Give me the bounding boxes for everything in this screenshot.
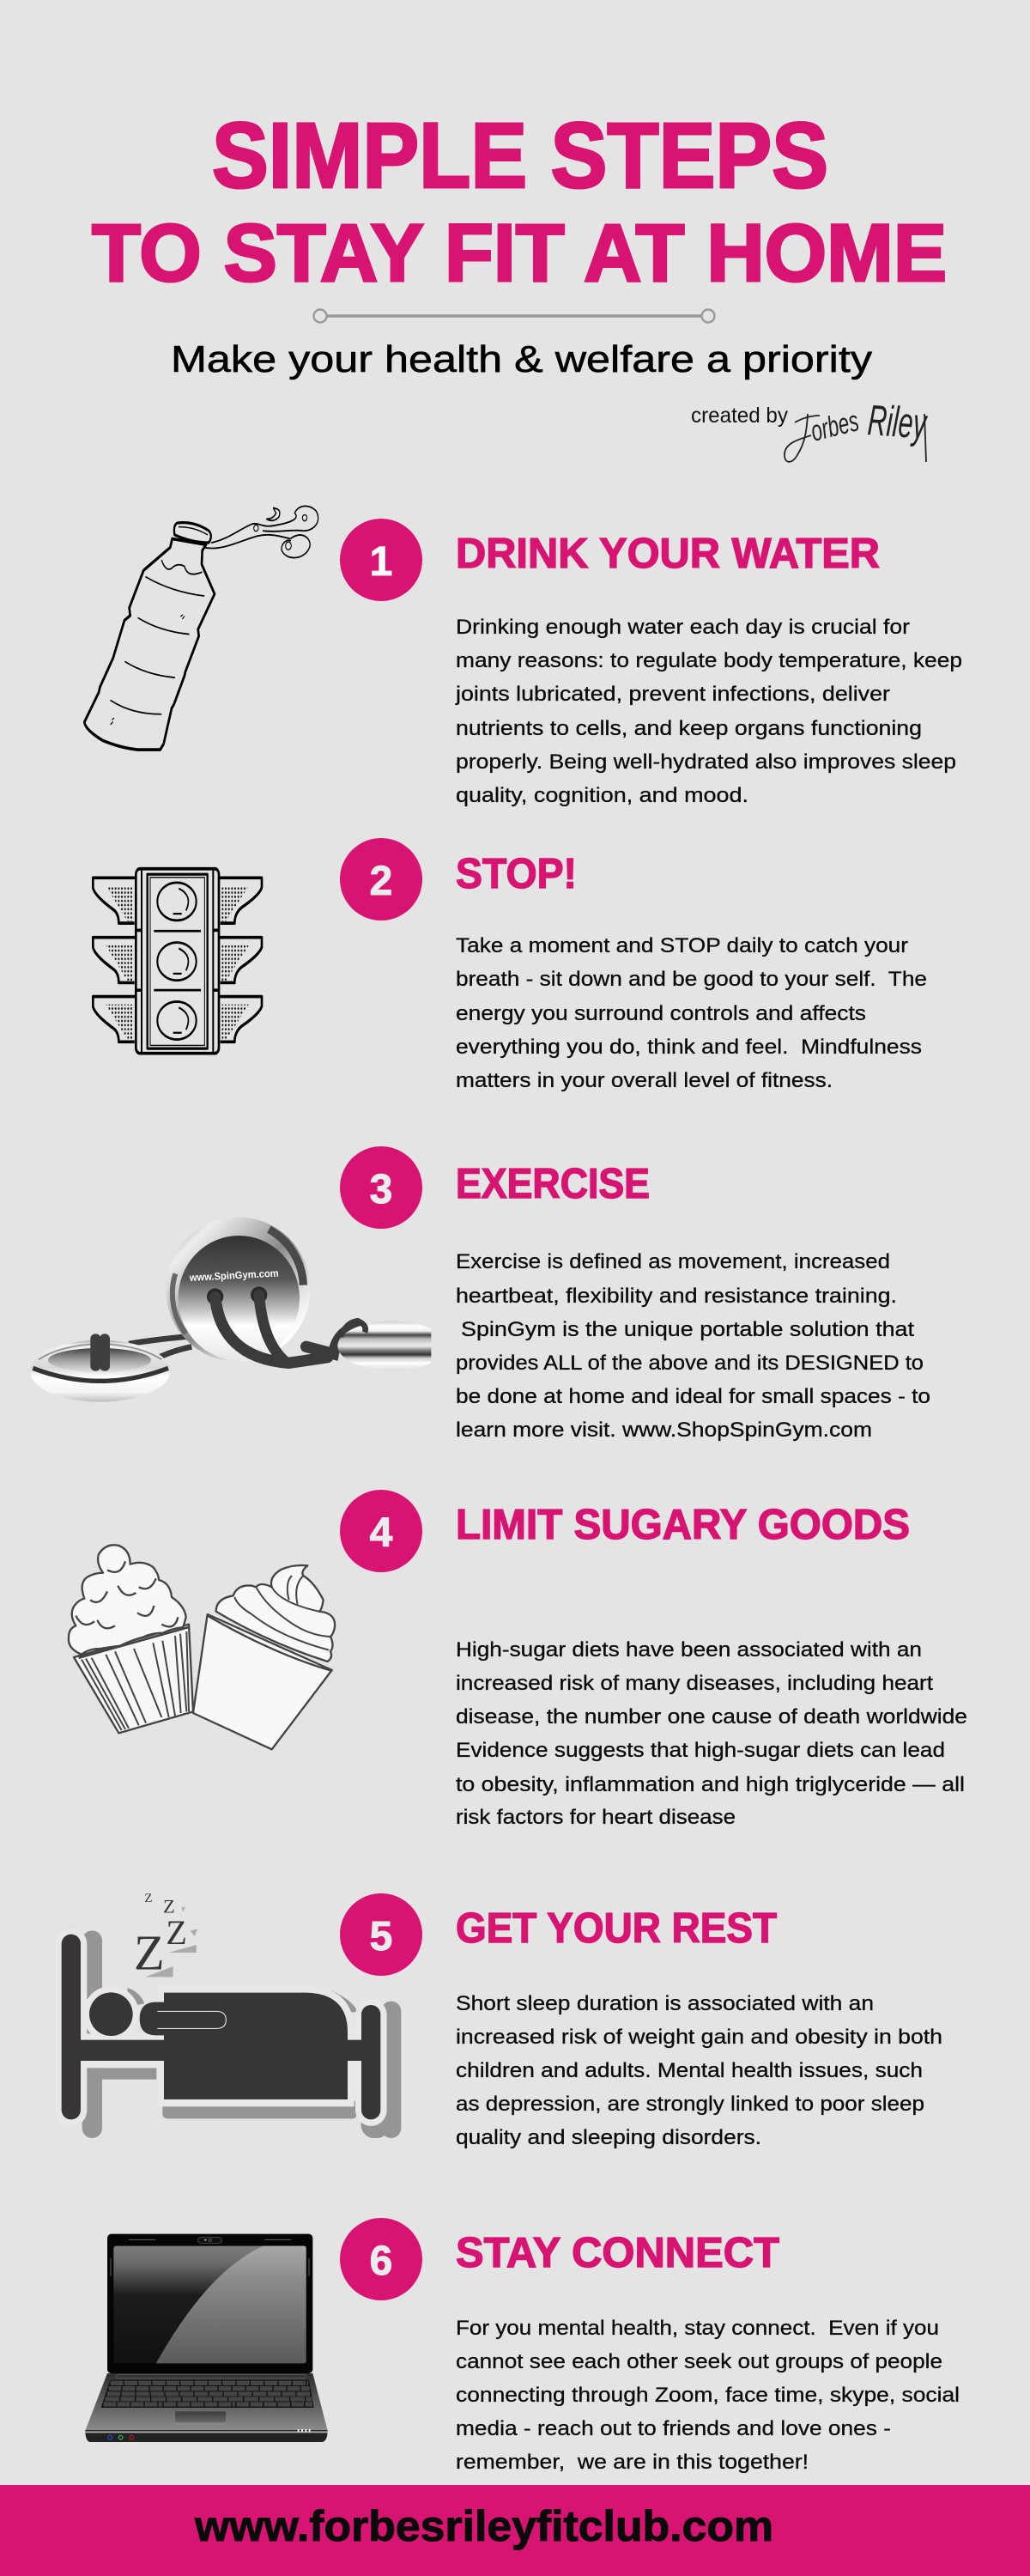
text block: exercise: learn more visit. www.ShopSpinGym.com (456, 1419, 872, 1442)
text block: water: nutrients to cells, and keep organs functioning (456, 717, 922, 740)
heading: get your rest: GET YOUR REST (456, 1905, 777, 1952)
text block: stop: everything you do, think and feel. Mindfulness (456, 1036, 922, 1059)
icon: person sleeping in bed: Z (163, 1895, 175, 1917)
icon: cupcakes (69, 1545, 335, 1749)
step number 2 (340, 838, 422, 920)
text block: sugar: Evidence suggests that high-sugar diets can lead (456, 1739, 945, 1762)
step number 1: 1 (370, 539, 392, 585)
text block: sugar: High-sugar diets have been associated with an (456, 1638, 922, 1662)
text block: stop: breath - sit down and be good to your self. The (456, 968, 927, 991)
step number 2: 2 (370, 859, 392, 904)
text block: exercise: SpinGym is the unique portable solution that (461, 1318, 914, 1341)
title: TO STAY FIT AT HOME (92, 208, 947, 299)
heading: exercise: EXERCISE (456, 1161, 650, 1207)
title: SIMPLE STEPS (212, 103, 828, 207)
icon: SpinGym device (30, 1217, 446, 1402)
text block: sugar: to obesity, inflammation and high triglyceride — all (456, 1773, 965, 1796)
icon: person sleeping in bed: Z (144, 1892, 152, 1905)
created by credit: created by (691, 404, 788, 428)
text block: sugar: increased risk of many diseases, including heart (456, 1672, 933, 1695)
text block: rest: as depression, are strongly linked to poor sleep (456, 2093, 924, 2116)
text block: exercise: Exercise is defined as movement, increased (456, 1250, 890, 1273)
icon: person sleeping in bed (56, 1892, 401, 2138)
text block: rest (456, 1992, 942, 2149)
footer band (0, 2485, 1030, 2576)
text block: sugar: disease, the number one cause of death worldwide (456, 1705, 967, 1728)
subtitle: Make your health & welfare a priority (171, 338, 872, 380)
text block: water: many reasons: to regulate body temperature, keep (456, 649, 962, 672)
icon: person sleeping in bed: Z (134, 1924, 165, 1980)
text block: stop (456, 934, 927, 1092)
panel: stay connect (85, 2218, 960, 2474)
heading: limit sugary goods: LIMIT SUGARY GOODS (456, 1502, 910, 1548)
panel: drink your water (84, 506, 962, 807)
divider line (314, 309, 714, 323)
heading: stop: STOP! (456, 851, 577, 897)
text block: connect: cannot see each other seek out groups of people (456, 2350, 942, 2373)
text block: rest: increased risk of weight gain and obesity in both (456, 2026, 942, 2049)
text block: water: joints lubricated, prevent infections, deliver (455, 683, 890, 706)
step number 4 (340, 1490, 422, 1572)
title (92, 103, 947, 299)
text block: stop: energy you surround controls and affects (456, 1002, 866, 1025)
signature (785, 396, 930, 462)
text block: connect: For you mental health, stay connect. Even if you (456, 2317, 939, 2340)
panel: get your rest (56, 1892, 942, 2149)
text block: exercise: be done at home and ideal for small spaces - to (456, 1385, 930, 1408)
text block: water: quality, cognition, and mood. (456, 784, 748, 807)
signature: Riley (866, 396, 930, 448)
icon: water bottle (84, 506, 318, 750)
step number 6 (340, 2218, 422, 2300)
step number 3 (340, 1146, 422, 1229)
text block: water: properly. Being well-hydrated also improves sleep (456, 750, 956, 774)
text block: connect: media - reach out to friends and love ones - (456, 2417, 891, 2440)
step number 3: 3 (370, 1167, 392, 1212)
text block: stop: Take a moment and STOP daily to catch your (456, 934, 908, 957)
text block: water (455, 616, 962, 807)
footer url: www.forbesrileyfitclub.com (194, 2502, 773, 2550)
icon: person sleeping in bed: Z (166, 1913, 187, 1952)
icon: SpinGym device: www.SpinGym.com (188, 1267, 279, 1284)
text block: rest: Short sleep duration is associated with an (456, 1992, 874, 2015)
text block: connect: connecting through Zoom, face time, skype, social (456, 2384, 960, 2407)
step number 5: 5 (370, 1914, 392, 1959)
step number 6: 6 (370, 2239, 392, 2284)
signature: orbes (808, 404, 862, 448)
text block: rest: children and adults. Mental health issues, such (456, 2059, 923, 2082)
panel: limit sugary goods (69, 1490, 967, 1829)
text block: exercise: heartbeat, flexibility and resistance training. (456, 1285, 897, 1308)
text block: connect (456, 2317, 960, 2474)
text block: exercise: provides ALL of the above and its DESIGNED to (456, 1352, 924, 1375)
heading: drink your water: DRINK YOUR WATER (456, 531, 880, 577)
heading: stay connect: STAY CONNECT (456, 2230, 779, 2276)
text block: sugar: risk factors for heart disease (456, 1806, 736, 1829)
icon: laptop (85, 2234, 328, 2442)
step number 5 (340, 1893, 422, 1976)
text block: rest: quality and sleeping disorders. (456, 2126, 761, 2149)
panel: stop (93, 838, 927, 1092)
text block: connect: remember, we are in this together! (456, 2451, 809, 2474)
text block: water: Drinking enough water each day is crucial for (456, 616, 910, 639)
panel: exercise (30, 1146, 930, 1442)
text block: sugar (456, 1638, 967, 1829)
step number 4: 4 (370, 1510, 393, 1556)
icon: traffic light (93, 869, 262, 1054)
text block: stop: matters in your overall level of fitness. (456, 1069, 833, 1092)
text block: exercise (456, 1250, 930, 1442)
step number 1 (340, 519, 422, 601)
